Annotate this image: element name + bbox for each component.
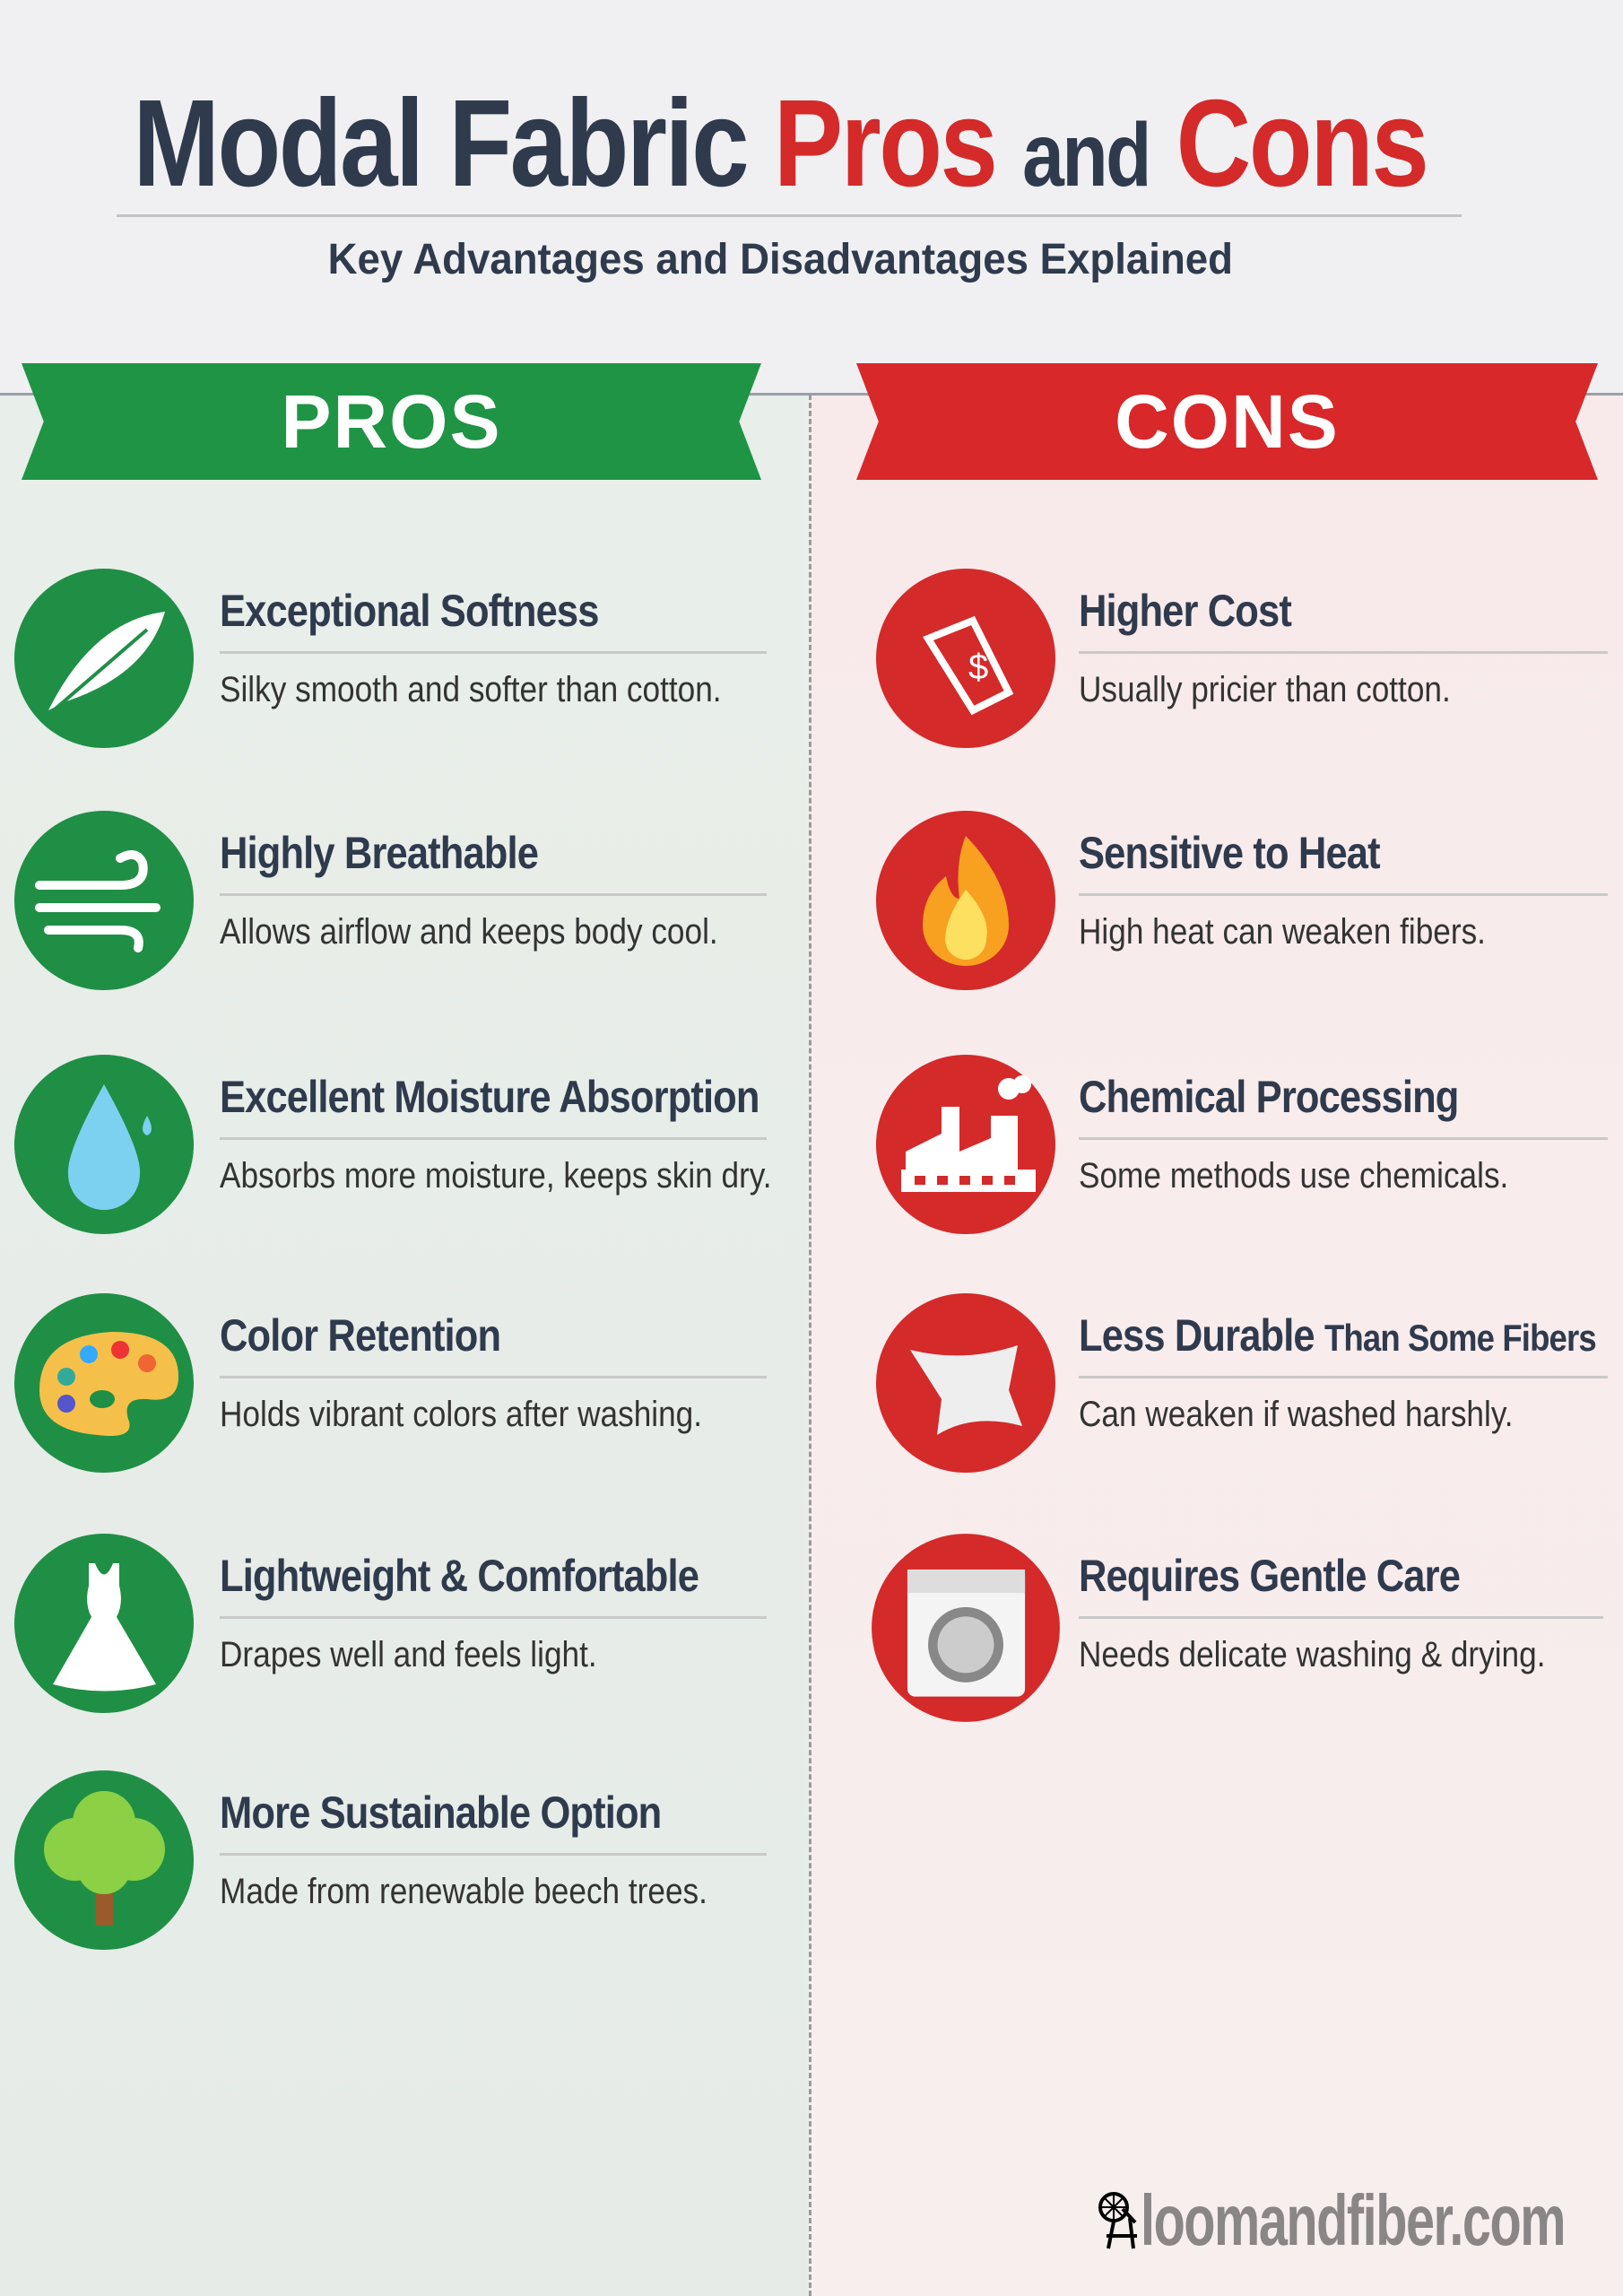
icon: washing machine — [872, 1534, 1060, 1722]
pros item 3: Excellent Moisture Absorption — [220, 1072, 759, 1122]
cons item 4: Can weaken if washed harshly. — [1079, 1395, 1514, 1434]
icon: price tag — [876, 569, 1055, 748]
pros item 4 — [14, 1293, 767, 1473]
icon: factory — [876, 1055, 1055, 1234]
pros item 2: Allows airflow and keeps body cool. — [220, 912, 718, 952]
pros item 6: Made from renewable beech trees. — [220, 1872, 707, 1911]
banner: cons: CONS — [1115, 379, 1340, 464]
cons item 3: Some methods use chemicals. — [1079, 1156, 1508, 1196]
pros item 2: Highly Breathable — [220, 828, 538, 878]
pros item 4: Color Retention — [220, 1310, 500, 1361]
icon: wind — [14, 811, 194, 990]
icon: spinning wheel — [1098, 2192, 1137, 2249]
background left — [0, 395, 809, 2296]
logo: loomandfiber.com — [1141, 2180, 1565, 2260]
icon: tree — [14, 1770, 194, 1950]
subtitle: Key Advantages and Disadvantages Explained — [327, 236, 1233, 283]
cons item 4 — [876, 1293, 1608, 1473]
cons item 2: High heat can weaken fibers. — [1079, 912, 1486, 952]
pros item 6: More Sustainable Option — [220, 1787, 661, 1838]
pros item 1: Silky smooth and softer than cotton. — [220, 670, 722, 709]
pros item 5: Drapes well and feels light. — [220, 1635, 597, 1674]
cons item 1: Usually pricier than cotton. — [1079, 670, 1451, 709]
banner: pros: PROS — [281, 379, 502, 464]
pros item 1: Exceptional Softness — [220, 586, 599, 636]
pros item 5: Lightweight & Comfortable — [220, 1551, 699, 1601]
icon: torn fabric — [876, 1293, 1055, 1473]
pros item 3 — [14, 1055, 772, 1234]
icon: flame — [876, 811, 1055, 990]
cons item 5: Requires Gentle Care — [1079, 1551, 1460, 1601]
cons item 1 — [876, 569, 1608, 748]
pros item 3: Absorbs more moisture, keeps skin dry. — [220, 1156, 772, 1196]
icon: water drop — [14, 1055, 194, 1234]
title: Modal Fabric Pros and Cons — [134, 74, 1427, 213]
cons item 4: Less Durable Than Some Fibers — [1079, 1310, 1596, 1361]
pros item 5 — [14, 1534, 767, 1713]
pros item 2 — [14, 811, 767, 990]
cons item 5 — [872, 1534, 1603, 1722]
icon: dress — [14, 1534, 194, 1713]
banner: cons — [856, 363, 1598, 480]
cons item 3: Chemical Processing — [1079, 1072, 1458, 1122]
icon: feather — [14, 569, 194, 748]
icon: price tag: $ — [968, 648, 988, 687]
icon: palette — [14, 1293, 194, 1473]
cons item 2 — [876, 811, 1608, 990]
cons item 1: Higher Cost — [1079, 586, 1291, 636]
pros item 4: Holds vibrant colors after washing. — [220, 1395, 702, 1434]
banner: pros — [22, 363, 761, 480]
pros item 6 — [14, 1770, 767, 1950]
cons item 3 — [876, 1055, 1608, 1234]
pros item 1 — [14, 569, 767, 748]
cons item 2: Sensitive to Heat — [1079, 828, 1380, 878]
cons item 5: Needs delicate washing & drying. — [1079, 1635, 1545, 1674]
background right — [809, 395, 1623, 2296]
